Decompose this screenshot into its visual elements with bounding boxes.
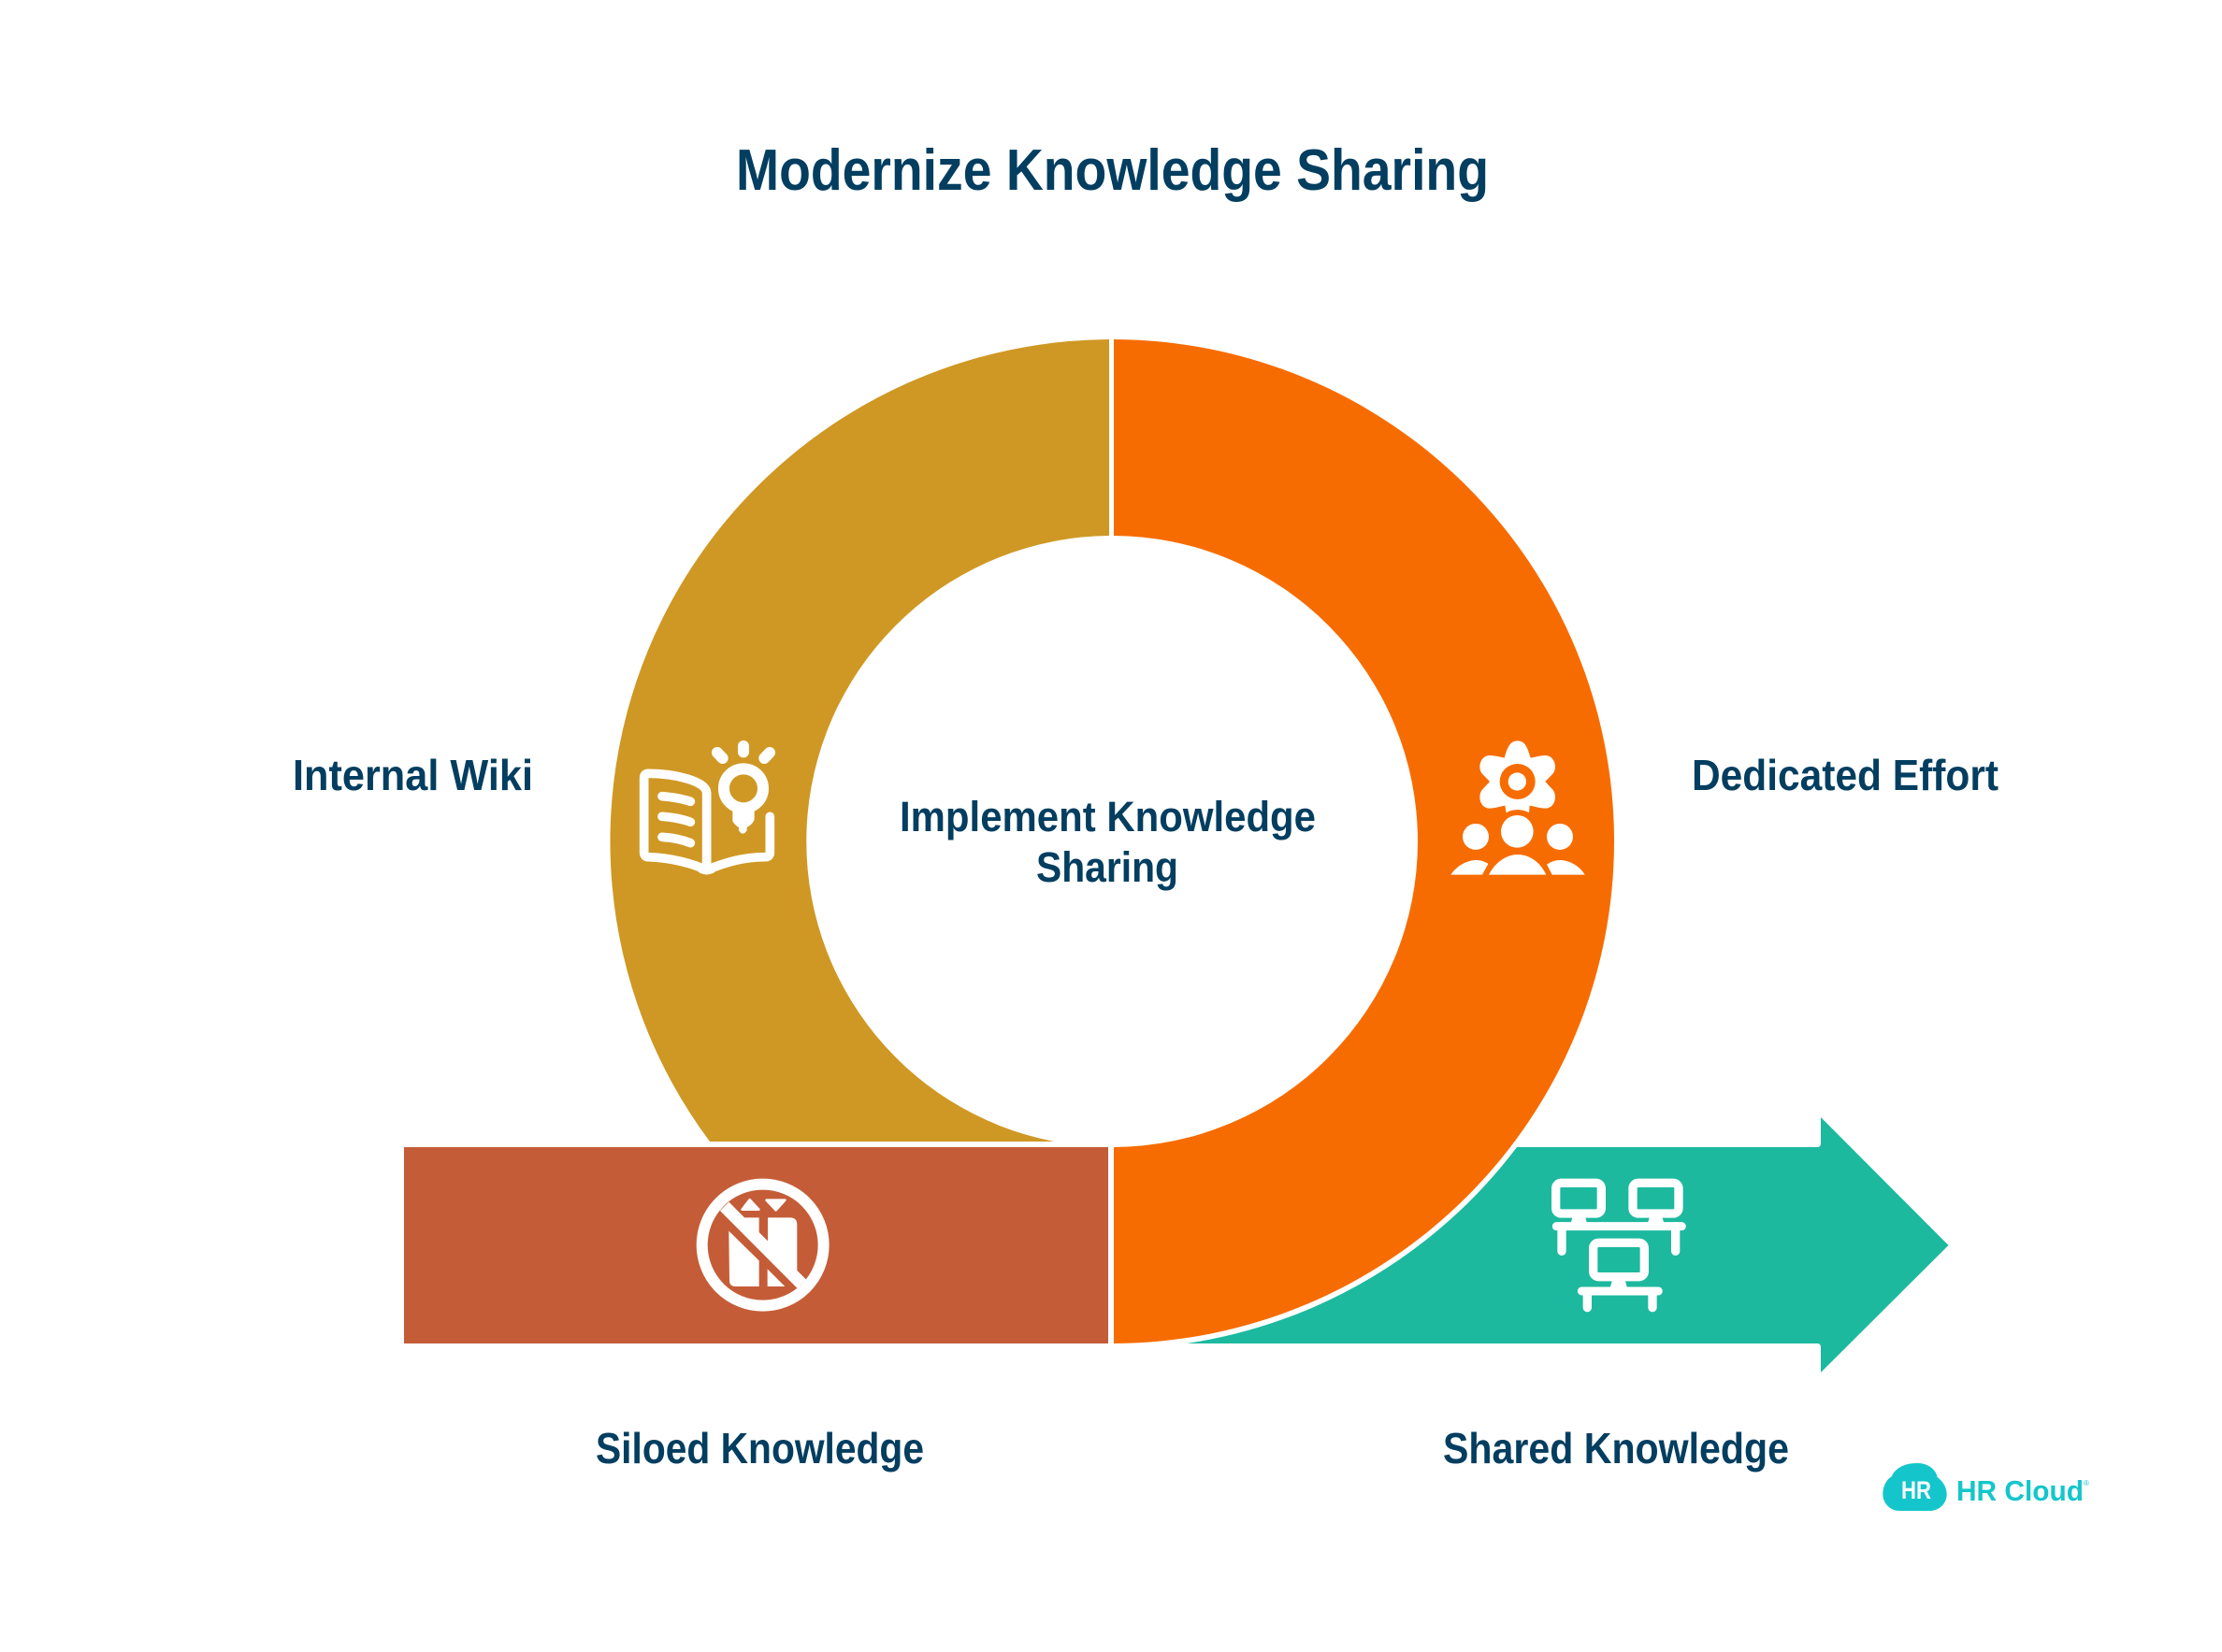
icon: team with gear (1450, 740, 1585, 875)
label: internal wiki: Internal Wiki (293, 751, 533, 799)
logo: HR Cloud: HR (1901, 1476, 1931, 1504)
center label: Implement Knowledge (900, 793, 1316, 840)
title: Modernize Knowledge Sharing (736, 138, 1489, 203)
label: dedicated effort: Dedicated Effort (1692, 751, 1998, 799)
center label: Sharing (1036, 843, 1178, 891)
logo: HR Cloud: HR Cloud (1956, 1474, 2084, 1507)
arrow: shared knowledge (1187, 1117, 1949, 1372)
label: shared knowledge: Shared Knowledge (1443, 1424, 1789, 1472)
logo: HR Cloud (1883, 1463, 2089, 1511)
ring segment: internal wiki (610, 339, 1109, 1142)
label: siloed knowledge: Siloed Knowledge (596, 1424, 924, 1472)
icon: networked computers (1556, 1183, 1681, 1308)
center label (900, 793, 1316, 891)
logo: HR Cloud: ® (2084, 1479, 2089, 1487)
icon: book with light bulb (644, 746, 770, 874)
ring segment: dedicated effort (1114, 339, 1614, 1343)
icon: prohibited silos (702, 1185, 824, 1306)
bar: siloed knowledge (404, 1147, 1108, 1343)
